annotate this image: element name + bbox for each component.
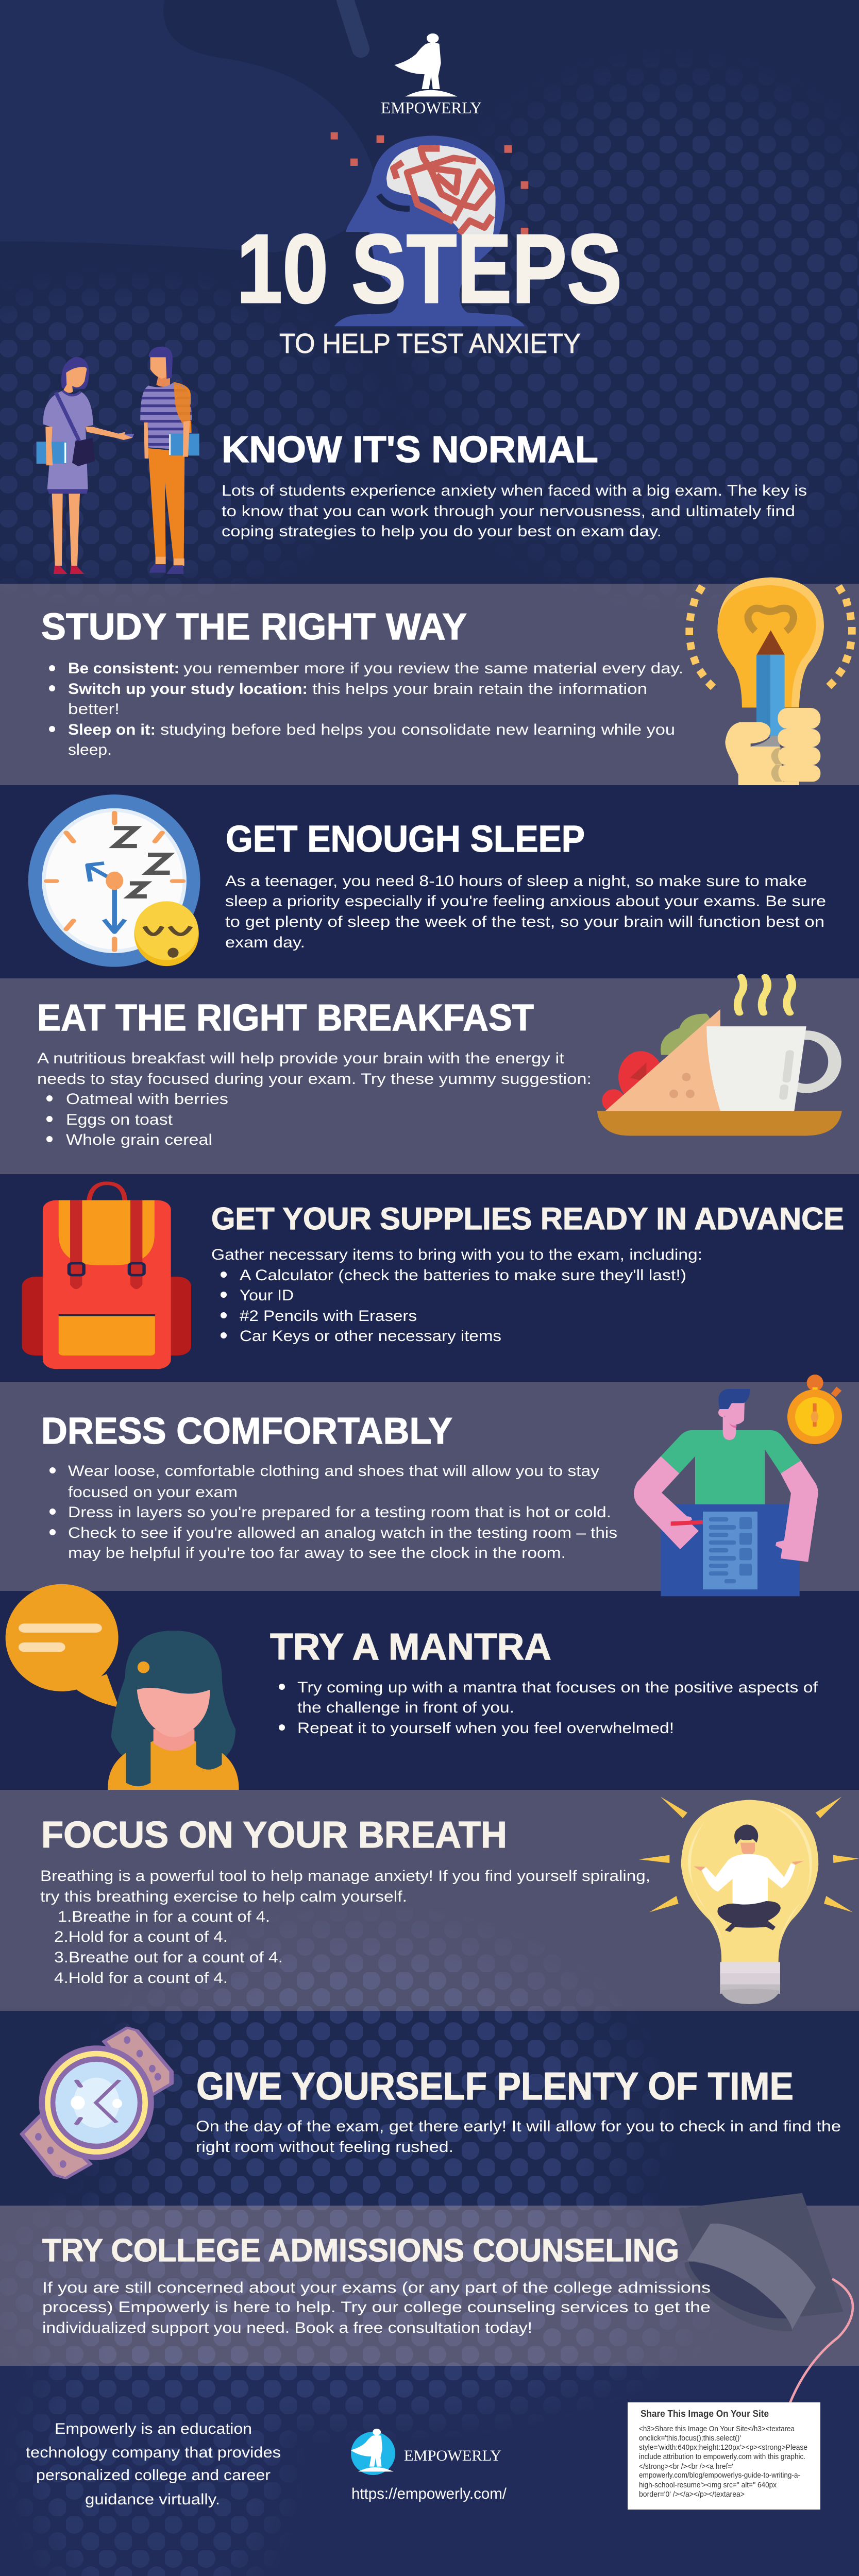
illustration: light bulb with pencil and hand bbox=[685, 578, 856, 786]
body text: Lots of students experience anxiety when faced with a big exam. The key is bbox=[222, 482, 807, 499]
body text: coping strategies to help you do your best on exam day. bbox=[222, 523, 662, 540]
bullet list: this helps your brain retain the information bbox=[312, 681, 647, 698]
illustration: clock with sleepy face bbox=[28, 794, 200, 967]
share box: empowerly.com/blog/empowerlys-guide-to-writing-a- bbox=[639, 2471, 800, 2480]
share box: border='0' /></a></p></textarea> bbox=[639, 2490, 745, 2499]
body text and numbered list: 2.Hold for a count of 4. bbox=[54, 1928, 228, 1945]
illustration: two students bbox=[37, 347, 199, 574]
bullet list: studying before bed helps you consolidate new learning while you bbox=[160, 721, 675, 738]
body text and list: A nutritious breakfast will help provide your brain with the energy it bbox=[37, 1050, 565, 1067]
heading: GIVE YOURSELF PLENTY OF TIME bbox=[196, 2064, 794, 2108]
bullet list bbox=[49, 1463, 617, 1562]
share box bbox=[628, 2402, 820, 2510]
heading: TRY A MANTRA bbox=[270, 1626, 551, 1668]
body text: exam day. bbox=[225, 934, 305, 951]
heading: GET ENOUGH SLEEP bbox=[226, 819, 585, 860]
bullet list: may be helpful if you're too far away to see the clock in the room. bbox=[68, 1545, 566, 1562]
bullet list bbox=[49, 660, 683, 758]
bullet list: the challenge in front of you. bbox=[297, 1699, 514, 1716]
illustration: girl with speech bubble bbox=[6, 1584, 239, 1790]
logo: Empowerly caped hero: EMPOWERLY bbox=[381, 98, 482, 117]
share box: <h3>Share this Image On Your Site</h3><textarea bbox=[639, 2425, 795, 2433]
body text bbox=[42, 2279, 711, 2336]
panel: study the right way bbox=[0, 578, 859, 786]
body text and numbered list: 1.Breathe in for a count of 4. bbox=[58, 1908, 270, 1925]
bullet list: Dress in layers so you're prepared for a testing room that is hot or cold. bbox=[68, 1504, 611, 1521]
body text and numbered list bbox=[40, 1868, 650, 1987]
illustration: student at desk with stopwatch bbox=[634, 1375, 842, 1596]
bullet list: Check to see if you're allowed an analog watch in the testing room – this bbox=[68, 1524, 617, 1541]
body text and list: Eggs on toast bbox=[66, 1111, 173, 1128]
bullet list: focused on your exam bbox=[68, 1484, 238, 1501]
body text: If you are still concerned about your exams (or any part of the college admissions bbox=[42, 2279, 711, 2296]
body text and list: #2 Pencils with Erasers bbox=[240, 1308, 417, 1325]
icon: head with maze brain bbox=[331, 132, 528, 326]
heading: FOCUS ON YOUR BREATH bbox=[41, 1815, 507, 1856]
heading: EAT THE RIGHT BREAKFAST bbox=[37, 997, 534, 1039]
panel: get enough sleep bbox=[0, 785, 859, 978]
body text and list: Whole grain cereal bbox=[66, 1131, 212, 1148]
body text and numbered list: Breathing is a powerful tool to help manage anxiety! If you find yourself spiraling, bbox=[40, 1868, 650, 1885]
body text and list bbox=[37, 1050, 592, 1148]
body text and list: Car Keys or other necessary items bbox=[240, 1328, 501, 1345]
body text: On the day of the exam, get there early! It will allow for you to check in and find the bbox=[196, 2118, 841, 2135]
panel: try college admissions counseling bbox=[0, 2193, 859, 2402]
heading: DRESS COMFORTABLY bbox=[41, 1411, 452, 1452]
heading: GET YOUR SUPPLIES READY IN ADVANCE bbox=[211, 1201, 844, 1236]
illustration: graduation cap with tassel bbox=[679, 2193, 853, 2402]
heading: KNOW IT'S NORMAL bbox=[222, 429, 598, 470]
body text and numbered list: try this breathing exercise to help calm yourself. bbox=[40, 1888, 407, 1905]
body text: As a teenager, you need 8-10 hours of sleep a night, so make sure to make bbox=[225, 873, 807, 890]
body text and list: needs to stay focused during your exam. Try these yummy suggestion: bbox=[37, 1071, 592, 1088]
bullet list: sleep. bbox=[68, 741, 112, 758]
logo: Empowerly badge: EMPOWERLY bbox=[404, 2447, 501, 2464]
body text and list: Gather necessary items to bring with you to the exam, including: bbox=[211, 1246, 702, 1263]
body text bbox=[225, 873, 826, 951]
body text: right room without feeling rushed. bbox=[196, 2139, 453, 2156]
company description: personalized college and career bbox=[36, 2467, 271, 2484]
illustration: person meditating in a light bulb bbox=[638, 1797, 859, 2004]
bullet list bbox=[279, 1679, 818, 1737]
share box: style='width:640px;height:120px'><p><strong>Please bbox=[639, 2443, 807, 2452]
body text: to know that you can work through your nervousness, and ultimately find bbox=[222, 503, 795, 520]
company description: guidance virtually. bbox=[85, 2491, 220, 2508]
bullet list: Sleep on it: bbox=[68, 721, 156, 738]
logo: Empowerly badge bbox=[351, 2429, 501, 2475]
panel: try a mantra bbox=[0, 1584, 859, 1790]
body text bbox=[222, 482, 807, 540]
panel: footer bbox=[26, 2402, 820, 2510]
body text and list: Oatmeal with berries bbox=[66, 1091, 228, 1108]
body text: process) Empowerly is here to help. Try our college counseling services to get the bbox=[42, 2299, 711, 2316]
panel: header bbox=[237, 33, 622, 359]
panel: dress comfortably bbox=[0, 1382, 859, 1591]
bullet list: better! bbox=[68, 701, 120, 718]
share box: high-school-resume'><img src='' alt='' 640px bbox=[639, 2481, 777, 2489]
share box: Share This Image On Your Site bbox=[641, 2409, 769, 2419]
share box: </strong><br /><br /><a href=' bbox=[639, 2462, 733, 2471]
panel: give yourself plenty of time bbox=[0, 2011, 859, 2206]
logo: Empowerly caped hero bbox=[381, 33, 482, 117]
website URL: https://empowerly.com/ bbox=[351, 2485, 507, 2502]
title: 10 STEPS bbox=[237, 214, 622, 324]
body text and numbered list: 3.Breathe out for a count of 4. bbox=[54, 1949, 283, 1966]
bullet list: Wear loose, comfortable clothing and shoes that will allow you to stay bbox=[68, 1463, 599, 1480]
body text and list: A Calculator (check the batteries to make sure they'll last!) bbox=[240, 1267, 686, 1284]
panel: know it's normal bbox=[37, 347, 807, 574]
bullet list: Repeat it to yourself when you feel overwhelmed! bbox=[297, 1720, 674, 1737]
company description bbox=[26, 2420, 281, 2508]
company description: technology company that provides bbox=[26, 2444, 281, 2461]
bullet list: Be consistent: bbox=[68, 660, 179, 677]
panel: focus on your breath bbox=[0, 1790, 859, 2011]
body text and list: Your ID bbox=[240, 1287, 294, 1304]
body text: sleep a priority especially if you're feeling anxious about your exams. Be sure bbox=[225, 893, 826, 910]
panel: eat the right breakfast bbox=[0, 977, 859, 1174]
body text: individualized support you need. Book a free consultation today! bbox=[42, 2319, 532, 2336]
share box: include attribution to empowerly.com with this graphic. bbox=[639, 2452, 805, 2461]
subtitle: TO HELP TEST ANXIETY bbox=[279, 328, 581, 359]
body text bbox=[196, 2118, 841, 2156]
heading: STUDY THE RIGHT WAY bbox=[41, 606, 467, 648]
panel: get your supplies ready bbox=[0, 1174, 859, 1382]
company description: Empowerly is an education bbox=[55, 2420, 252, 2437]
heading: TRY COLLEGE ADMISSIONS COUNSELING bbox=[42, 2233, 679, 2268]
illustration: backpack bbox=[22, 1183, 191, 1369]
illustration: breakfast sandwich and coffee bbox=[597, 977, 842, 1136]
bullet list: Try coming up with a mantra that focuses on the positive aspects of bbox=[297, 1679, 818, 1696]
share box: onclick='this.focus();this.select()' bbox=[639, 2434, 741, 2443]
bullet list: Switch up your study location: bbox=[68, 681, 308, 698]
bullet list: you remember more if you review the same material every day. bbox=[183, 660, 683, 677]
body text and numbered list: 4.Hold for a count of 4. bbox=[54, 1970, 228, 1987]
body text: to get plenty of sleep the week of the test, so your brain will function best on bbox=[225, 913, 824, 930]
illustration: wristwatch bbox=[22, 2028, 172, 2178]
body text and list bbox=[211, 1246, 702, 1345]
